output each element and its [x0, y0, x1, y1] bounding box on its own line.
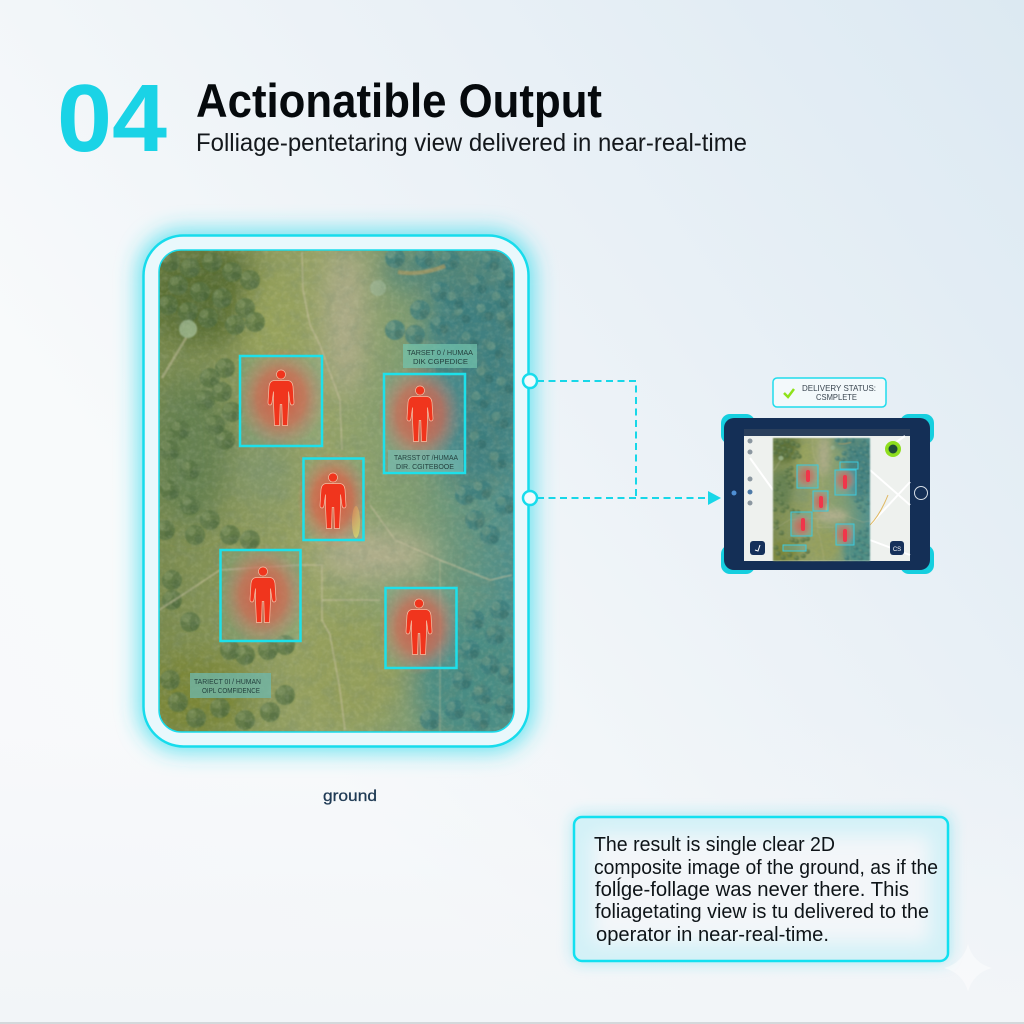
tree clusters — [155, 248, 518, 732]
sidebar icons — [748, 438, 752, 506]
map roads — [750, 436, 910, 555]
tablet camera — [732, 490, 736, 496]
icon: sparkle — [944, 944, 992, 992]
icon: check mark — [784, 389, 794, 397]
target label: top right: TARSET 0 / HUMAA — [407, 348, 473, 357]
frame glow — [138, 230, 534, 752]
tablet home button — [914, 486, 928, 500]
arrow: connector to tablet — [523, 374, 721, 505]
tablet screen: CS — [893, 547, 901, 553]
section number: 04 — [57, 65, 167, 172]
mini target boxes — [783, 462, 858, 551]
map image — [768, 435, 873, 564]
target label: top right — [403, 344, 477, 368]
caption: ground: ground — [323, 788, 377, 805]
target label: bottom left — [190, 673, 271, 698]
mini person markers — [801, 470, 847, 542]
delivery status badge — [773, 378, 886, 407]
target box 2 — [384, 374, 465, 473]
delivery status badge: DELIVERY STATUS: — [802, 383, 876, 393]
icon: globe badge — [885, 441, 901, 457]
target box 4 — [220, 550, 300, 641]
target label: inside box 2 — [388, 450, 463, 472]
target label: inside box 2: DIR. CGITEBOOE — [396, 462, 454, 471]
subtitle: Folliage-pentetaring view delivered in near-real-time — [196, 129, 747, 157]
target label: top right: DIK CGPEDICE — [413, 357, 468, 366]
dirt paths — [159, 252, 512, 732]
aerial image — [160, 250, 514, 732]
panel: aerial composite frame — [138, 230, 534, 752]
tablet screen — [744, 429, 910, 564]
panel: description: The result is single clear 2D — [594, 834, 835, 856]
image border — [159, 250, 514, 732]
pale tree canopy — [179, 320, 197, 338]
panel: description: composite image of the ground, as if the — [594, 857, 938, 879]
panel: description: folĺge-follage was never there. This — [595, 877, 909, 901]
target label: inside box 2: TARSST 0T /HUMAA — [394, 453, 458, 462]
heat signatures — [237, 348, 325, 448]
delivery status badge: CSMPLETE — [816, 392, 857, 402]
target box 3 — [304, 458, 364, 540]
panel: description: operator in near-real-time. — [596, 924, 829, 946]
panel: description: foliagetating view is tu delivered to the — [595, 901, 929, 923]
target box 1 — [240, 356, 322, 446]
target label: bottom left: TARIECT 0I / HUMAN — [194, 677, 261, 686]
tablet corner accents — [721, 414, 934, 574]
title: Actionatible Output — [196, 74, 602, 127]
tablet device — [721, 414, 934, 574]
screen buttons — [750, 541, 765, 555]
frame body — [144, 236, 528, 746]
target label: bottom left: OIPL COMFIDENCE — [202, 686, 260, 695]
panel: description — [572, 814, 951, 963]
target box 5 — [386, 588, 456, 668]
